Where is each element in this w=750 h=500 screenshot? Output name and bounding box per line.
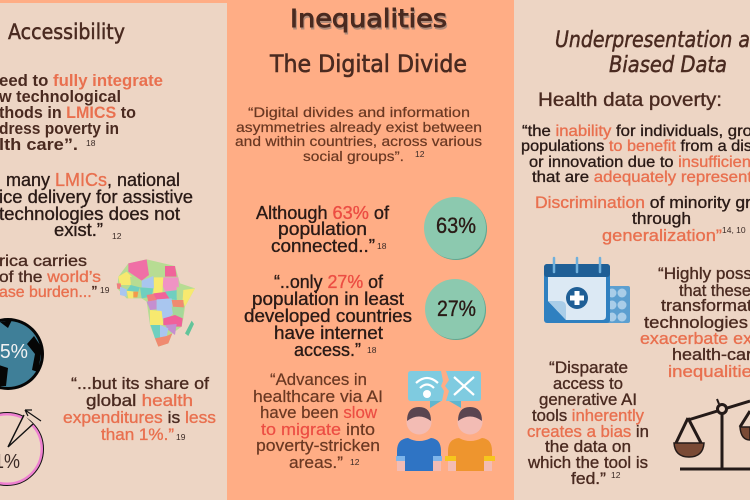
text: 63% connected: population [278,219,367,239]
text: 27% internet access: population in least [252,289,404,309]
text: service delivery quote: ice delivery for assistive [0,187,193,207]
text: disparate access quote: access to [553,374,623,393]
text: 27% internet access: have internet [274,323,383,343]
text: health expenditures quote: “...but its share of [71,374,209,393]
text: integrate quote: eed to fully integrate [0,71,163,90]
text: disparate access quote: creates a bias in [527,422,649,441]
text: data poverty definition: populations to benefit from a dis [521,138,750,155]
icon: globe 25% [0,318,44,390]
stat circle: 27%: 27% [437,296,476,321]
text: slow to migrate quote: have been slow [260,403,378,422]
text: integrate quote: thods in LMICS to [0,103,136,122]
text: integrate quote [0,71,163,154]
text: data poverty definition: or innovation due to insufficien [529,154,750,171]
text: integrate quote: dress poverty in [0,119,119,138]
text: discrimination: generalization” [602,226,722,245]
text: disparate access quote: which the tool is [527,453,648,472]
panel: the digital divide [235,4,495,472]
text: data poverty definition: “the inability for individuals, gro [522,123,750,140]
text: service delivery quote: exist.” [54,220,103,240]
text: slow to migrate quote: poverty-stricken [256,436,380,455]
text: exacerbate inequalities quote: inequalitie [668,362,750,381]
text: 63% connected: Although 63% of [256,203,390,223]
text: disease burden quote [0,253,110,301]
text: 27% internet access: developed countries [244,306,412,326]
text: health expenditures quote: expenditures is less [63,408,216,427]
text: service delivery quote: many LMICs, national [6,170,180,190]
text: discrimination: 14, 10 [722,225,746,235]
text: service delivery quote: technologies does not [0,204,180,224]
text: disparate access quote: fed.” [571,469,606,488]
text: exacerbate inequalities quote: “Highly poss [658,264,750,283]
text: exacerbate inequalities quote: health-car [672,345,750,364]
text: data poverty definition [521,123,750,186]
stat circle: 63%: 63% [436,213,476,238]
text: 27% internet access: “..only 27% of [274,272,384,292]
text: digital divides quote: “Digital divides and information [248,104,470,120]
icon: africa map [117,259,195,347]
panel: accessibility [0,3,227,500]
text: disease burden quote: 19 [100,285,110,295]
text: discrimination [535,193,750,245]
text: 63% connected: 18 [377,241,387,251]
text: slow to migrate quote: healthcare via AI [253,387,383,406]
text: health expenditures quote [63,374,216,444]
text: slow to migrate quote: areas.” [289,453,343,472]
text: discrimination: Discrimination of minority gr [535,193,750,212]
text: disease burden quote: ase burden...” [0,284,97,301]
text: integrate quote: 18 [86,138,96,148]
title: Inequalities [290,4,447,33]
text: 63% connected [256,203,390,256]
icon: medical calendar and pills [544,258,630,323]
text: exacerbate inequalities quote: transformat [661,296,750,315]
text: service delivery quote: 12 [112,231,122,241]
text: slow to migrate quote [253,370,383,472]
text: service delivery quote [0,170,193,241]
text: disease burden quote: rica carries [0,253,87,270]
stat circle: 63% [424,197,487,260]
icon: balance scale [674,399,750,469]
text: exacerbate inequalities quote: exacerbate ex [640,329,750,348]
text: digital divides quote: social groups”. [303,148,404,164]
text: disparate access quote: the data on [545,437,631,456]
heading: accessibility: Accessibility [8,20,125,44]
text: data poverty definition: that are adequately represent [532,169,750,186]
text: slow to migrate quote: “Advances in [270,370,367,389]
text: disparate access quote [527,358,649,488]
heading: health data poverty: Health data poverty: [538,90,722,111]
text: slow to migrate quote: to migrate into [261,420,375,439]
text: disparate access quote: generative AI [539,390,637,409]
text: health expenditures quote: 19 [176,432,186,442]
panel: underrepresentation and biased data [514,0,750,500]
text: 27% internet access [244,272,412,360]
text: 63% connected: connected..” [271,236,375,256]
text: digital divides quote: 12 [415,149,425,159]
text: integrate quote: lth care”. [0,135,78,154]
text: disparate access quote: tools inherently [532,406,644,425]
heading: the digital divide: The Digital Divide [269,50,467,78]
text: discrimination: through [632,209,691,228]
text: disparate access quote: “Disparate [549,358,628,377]
text: exacerbate inequalities quote: technologies [644,313,748,332]
text: digital divides quote: asymmetries already exist between [236,119,482,135]
text: health expenditures quote: global health [86,391,193,410]
text: digital divides quote: and within countries, across various [235,133,482,149]
text: integrate quote: w technological [0,87,121,106]
text: disparate access quote: 12 [611,470,621,480]
heading: underrepresentation and biased data [555,28,750,78]
text: health expenditures quote: than 1%.” [101,425,174,444]
text: 27% internet access: 18 [367,345,377,355]
text: slow to migrate quote: 12 [350,457,360,467]
title: Inequalities [291,6,448,35]
text: digital divides quote [235,104,482,164]
icon: two people with wifi and no-wifi bubbles [396,371,495,471]
heading: underrepresentation and biased data: Biased Data [609,53,727,78]
text: disease burden quote: of the world’s [0,269,101,286]
stat circle: 27% [425,279,486,340]
text: exacerbate inequalities quote [640,264,750,381]
icon: pie chart 1% [0,410,44,486]
text: 27% internet access: access.” [294,340,361,360]
